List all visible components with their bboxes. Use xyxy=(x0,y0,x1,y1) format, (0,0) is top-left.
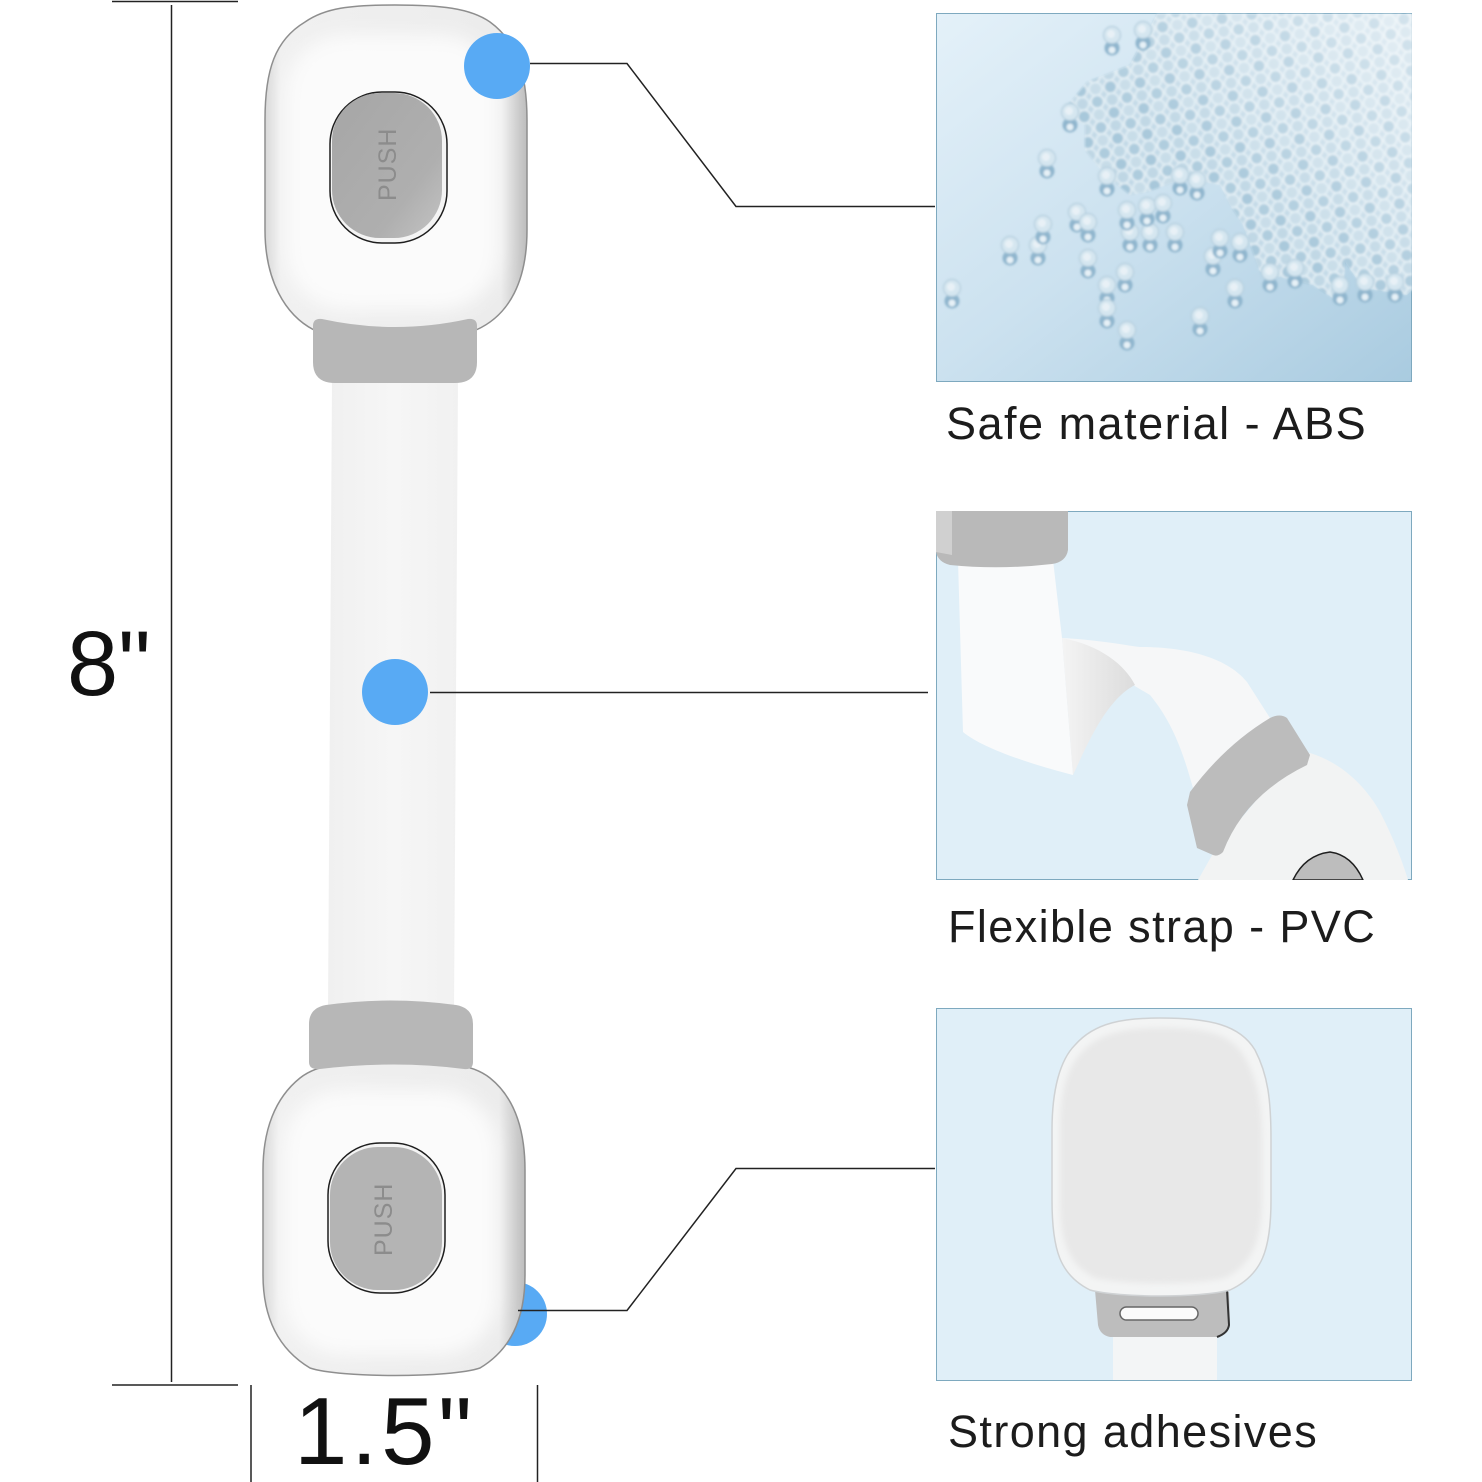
beads pile xyxy=(944,14,1412,350)
label: 8 inches: 8" xyxy=(67,613,151,715)
label: 1.5 inches: 1.5" xyxy=(294,1378,476,1482)
caption: safe material: Safe material - ABS xyxy=(946,398,1367,449)
connector line: top dot to ABS panel xyxy=(530,64,935,206)
strap xyxy=(328,380,458,1010)
callout dot: strap xyxy=(362,659,428,725)
product: child safety strap lock xyxy=(263,5,527,1376)
lower collar xyxy=(1187,716,1310,856)
curved strap section xyxy=(1062,638,1270,788)
top push button xyxy=(330,92,447,243)
bottom collar xyxy=(309,1000,473,1069)
strap stub xyxy=(1113,1335,1217,1380)
lock push button xyxy=(1293,852,1363,880)
top collar xyxy=(313,319,477,383)
bottom push button xyxy=(328,1143,445,1293)
scattered beads xyxy=(944,22,1404,350)
caption: flexible strap: Flexible strap - PVC xyxy=(948,901,1376,952)
flat strap section xyxy=(958,560,1073,775)
top lock body xyxy=(265,5,527,330)
connector line: strap dot to PVC panel xyxy=(430,692,928,694)
bottom push button: PUSH xyxy=(370,1183,398,1256)
strap fold xyxy=(1062,638,1135,775)
callout dot: bottom adhesive xyxy=(483,1282,547,1346)
panel: flexible strap PVC xyxy=(936,511,1412,880)
panel: strong adhesives xyxy=(936,1008,1412,1380)
dimension: width 1.5 inches xyxy=(251,1378,538,1482)
bottom lock body xyxy=(263,1062,525,1376)
top push button: PUSH xyxy=(374,128,402,201)
buckle xyxy=(1095,1290,1230,1337)
adhesive pad xyxy=(1052,1018,1271,1296)
lock body corner xyxy=(1198,753,1408,880)
connector line: bottom dot to adhesive panel xyxy=(518,1168,935,1310)
dimension: height 8 inches xyxy=(67,2,238,1385)
callout dot: top body xyxy=(464,33,530,99)
caption: strong adhesives: Strong adhesives xyxy=(948,1406,1318,1457)
panel: safe material ABS beads xyxy=(936,14,1412,382)
upper collar xyxy=(936,511,1068,567)
